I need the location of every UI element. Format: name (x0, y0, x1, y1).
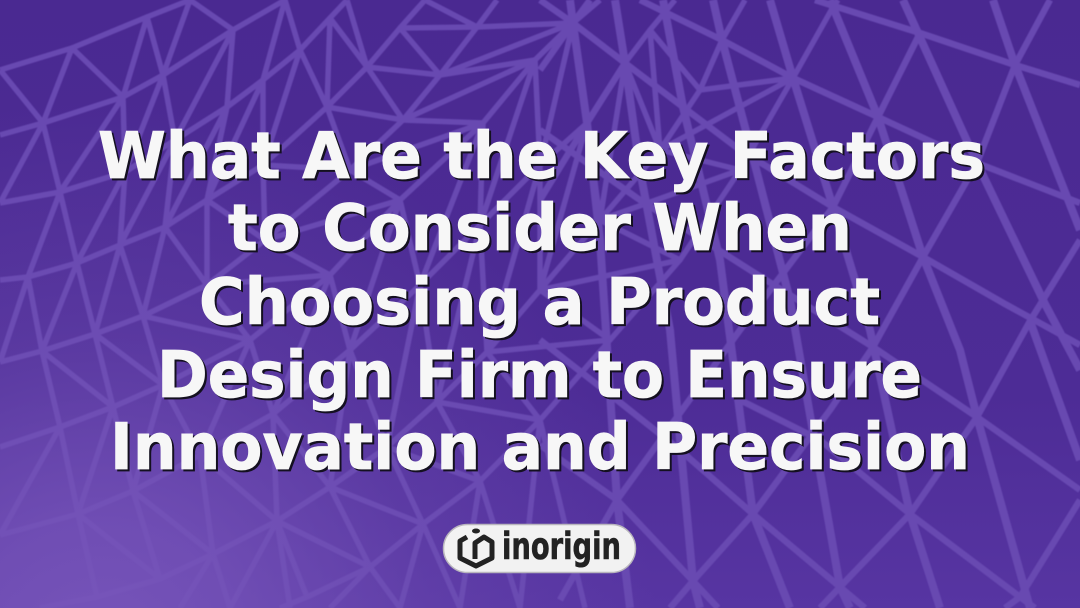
title line 5: Innovation and Precision (110, 411, 970, 485)
title (98, 120, 985, 485)
logo wordmark: inorigin (502, 525, 621, 568)
title line 3: Choosing a Product (199, 266, 880, 340)
title line 2: to Consider When (228, 192, 852, 266)
title line 1: What Are the Key Factors (98, 120, 985, 194)
title line 4: Design Firm to Ensure (157, 339, 922, 413)
logo badge (444, 524, 636, 572)
icon: inorigin hexagon mark (460, 528, 492, 566)
